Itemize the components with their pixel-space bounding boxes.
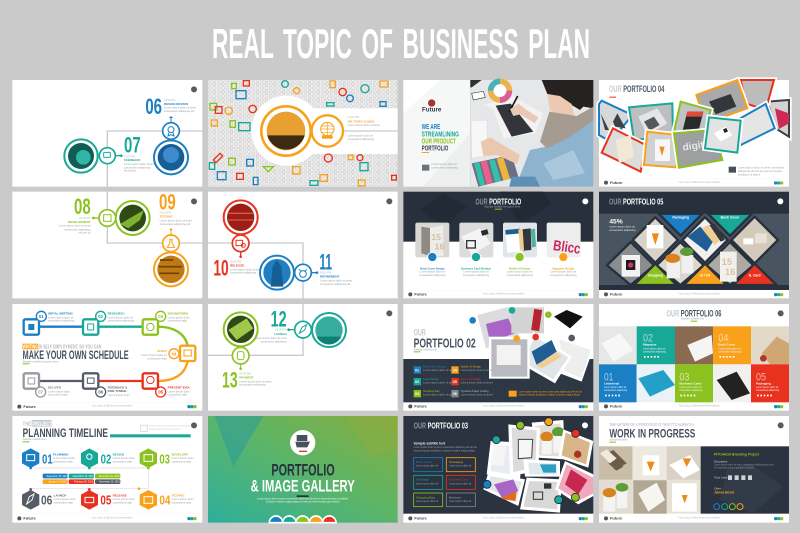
slide group: bottom-left quadrant: [12, 304, 398, 523]
diamonds: [607, 214, 778, 285]
slide: portfolio 03: eiusmod tempor incididunt ut labore et dolore magna aliqua: [414, 449, 476, 452]
slide: portfolio 06: consectetur adipiscing: [604, 389, 628, 392]
slide: portfolio 02: Shopping Bag: [423, 389, 440, 393]
slide: 08 and 09 timeline: 08: [74, 194, 91, 219]
slide: portfolio 02: Book Cover Design: [423, 365, 446, 369]
slide: our portfolio cards: Sample subtitle text goes here: [484, 204, 521, 208]
slide: portfolio 02: Lorem ipsum dolor sit amet: [461, 380, 493, 384]
slide: planning timeline: consectetur adip: [53, 459, 73, 463]
footer: [408, 403, 588, 409]
slide: 10 and 11 timeline: REFINEMENT: [320, 275, 340, 279]
slide: 08 and 09 timeline: 09: [159, 189, 176, 214]
footer: [403, 290, 593, 297]
footer: Your topic of Business presentation: [678, 515, 720, 519]
slide: portfolio 02: Lorem ipsum dolor sit amet: [461, 368, 493, 372]
slide: 10 and 11 timeline: Lorem ipsum dolor sit amet: [320, 279, 352, 283]
outlined boxes: [414, 458, 475, 507]
slide: we turn global: [208, 80, 398, 187]
slide: 06 and 07 timeline: consectetur adipiscing: [124, 165, 151, 169]
slide: 06 and 07 timeline: Lorem ipsum dolor sit amet: [124, 162, 156, 166]
numbered list: 06: [453, 392, 457, 396]
slide: portfolio 03: Shopping Bag: [416, 495, 435, 499]
slide: portfolio 02: Lorem ipsum dolor sit amet: [423, 392, 455, 396]
slide: 06 and 07 timeline: consectetur adipiscing elit: [164, 109, 195, 113]
slide: planning timeline: 05: [100, 493, 111, 507]
headline: [422, 122, 459, 153]
slide: our portfolio cards: Mobile UI Design: [509, 266, 531, 270]
slide: make your own schedule: Lorem ipsum dolor sit: [141, 353, 167, 357]
slide: make your own schedule: BRAINSTORM: [168, 311, 188, 315]
footer: Future: [414, 404, 428, 409]
slide: portfolio 03: Lorem ipsum dolor sit: [449, 482, 472, 485]
footer: Your topic of Business presentation: [483, 515, 525, 519]
slide: our portfolio cards: Lorem ipsum dolor sit: [463, 270, 489, 274]
footer: Future: [610, 404, 623, 409]
slide: our portfolio cards: [403, 192, 593, 298]
slide: planning timeline: Lorem ipsum dolor: [113, 497, 135, 501]
slide: portfolio 05: OUR PORTFOLIO 05: [609, 196, 663, 206]
slide: planning timeline: TESTING: [172, 493, 185, 497]
slide: 10 and 11 timeline: 03:00 PM: [230, 259, 241, 263]
slide: portfolio 03: Lorem ipsum dolor sit: [449, 465, 472, 468]
slide: portfolio and image gallery cover: [208, 416, 398, 523]
date pills: [43, 474, 120, 484]
slide: work in progress: [599, 416, 789, 523]
slide: planning timeline: DESIGN: [113, 452, 124, 456]
slide: portfolio 05: Book Cover: [721, 216, 740, 220]
slide: make your own schedule: 02: [98, 314, 104, 319]
numbered list: 04: [453, 368, 458, 372]
slide: 06 and 07 timeline: Lorem ipsum dolor sit amet: [164, 106, 196, 110]
slide: planning timeline: 02: [101, 452, 111, 466]
slide: portfolio 06: consectetur adipiscing: [756, 389, 780, 392]
slide: portfolio 02: Lorem ipsum dolor sit amet consectetur adipiscing elit sed do: [519, 390, 582, 393]
cards: Blicc: [552, 238, 581, 258]
headline: WE ARE: [422, 122, 440, 131]
slide: portfolio and image gallery cover: PORTFOLIO: [271, 460, 335, 479]
slide: portfolio 06: Packaging: [756, 381, 771, 385]
slide: 12 and 13 timeline: Lorem ipsum dolor sit amet: [255, 336, 287, 340]
slide: our portfolio cards: Lorem ipsum dolor sit: [420, 270, 445, 274]
slide: portfolio 05: 45%: [609, 218, 623, 225]
slide: work in progress: WORK IN PROGRESS: [609, 426, 695, 440]
footer: Future: [23, 404, 37, 409]
footer: Future: [610, 292, 623, 297]
slide: portfolio 02: PORTFOLIO 02: [414, 336, 476, 350]
slide: planning timeline: Lorem ipsum dolor: [172, 497, 194, 501]
slide: portfolio 02: Mobile UI Design: [461, 365, 481, 369]
footer: Your topic of Business presentation: [91, 403, 133, 407]
slide: planning timeline: Lorem ipsum dolor sit amet consectetur: [149, 425, 190, 428]
footer: Future: [414, 292, 428, 297]
slide: make your own schedule: 05: [158, 390, 164, 395]
slide: portfolio 06: OUR PORTFOLIO 06: [667, 308, 721, 318]
numbered list: [414, 366, 459, 397]
slide: portfolio 03: OUR PORTFOLIO 03: [414, 420, 468, 430]
slide: planning timeline: 03: [159, 452, 170, 466]
slide: portfolio 03: Book Cover: [416, 460, 432, 464]
slide: work in progress: Lorem ipsum dolor sit amet consectetur adipiscing elit sed: [714, 463, 774, 466]
slide: make your own schedule: Lorem ipsum dolor: [168, 315, 190, 319]
headline: WRITING IS SELF EMPLOYMENT, SO YOU CAN: [23, 345, 101, 351]
slide: make your own schedule: Lorem ipsum dolor sit: [48, 315, 74, 319]
slide group: bottom-right quadrant: [403, 304, 789, 523]
slide: planning timeline: Lorem ipsum dolor: [113, 456, 135, 460]
slide: 08 and 09 timeline: DEVELOPMENT: [68, 220, 91, 224]
slide: portfolio 06: Lorem ipsum dolor sit: [604, 386, 627, 389]
slide: portfolio 06: Lorem ipsum dolor sit: [679, 386, 702, 389]
slide: planning timeline: Sample subtitle text: [23, 437, 46, 441]
slide: portfolio 03: Lorem ipsum dolor sit: [416, 482, 439, 485]
footer: [12, 403, 202, 409]
slide: 08 and 09 timeline: elit sed do: [79, 231, 91, 235]
slide: make your own schedule: BUILD: [158, 349, 168, 353]
slide: make your own schedule: FEEDBACK &: [108, 385, 128, 389]
slide: portfolio 03: Lorem ipsum dolor sit: [416, 500, 439, 503]
slide: portfolio 06: 01: [604, 371, 613, 383]
slide: make your own schedule: 01: [39, 314, 44, 319]
slide: portfolio 06: 04: [718, 332, 728, 344]
slide: portfolio 02: Typeface Paper Cutting: [461, 389, 489, 393]
slide: portfolio 06: consectetur adipiscing: [679, 389, 703, 392]
slide: our portfolio cards: Book Cover Design: [420, 266, 445, 270]
slide: planning timeline: RELEASE: [113, 493, 127, 497]
footer: Future: [610, 180, 623, 185]
slide: portfolio 02: Lorem ipsum dolor sit amet: [423, 368, 455, 372]
slide: portfolio 03: Lorem ipsum dolor sit: [449, 500, 472, 503]
slide: portfolio 04: incididunt ut labore: [738, 172, 761, 176]
slide: portfolio 02: Logo Mockup: [423, 377, 439, 381]
slide group: top-right quadrant: [403, 80, 789, 298]
slide: portfolio 02: Sample subtitle text: [414, 347, 437, 351]
slide: 12 and 13 timeline: LAUNCH: [274, 332, 287, 336]
slide: 08 and 09 timeline: 03:00 PM: [79, 216, 91, 220]
footer: [599, 179, 789, 185]
slide: our portfolio cards: Business Card Mockup: [461, 266, 491, 270]
photo collage: [483, 420, 593, 513]
slide: planning timeline: LAUNCH: [54, 493, 66, 497]
slide: make your own schedule: consectetur adipiscing: [48, 319, 75, 323]
slide: portfolio 06: Lorem ipsum dolor sit: [643, 347, 666, 350]
slide: planning timeline: consectetur adip: [172, 459, 192, 463]
slide: portfolio 06: consectetur adipiscing: [718, 350, 742, 353]
slide: planning timeline: DEVELOPE: [172, 452, 188, 456]
footer: [604, 515, 783, 521]
slide: make your own schedule: [12, 304, 202, 411]
slide: make your own schedule: PRESENT IDEA: [168, 385, 191, 389]
numbered list: 03: [415, 392, 419, 396]
hexagons bottom row: [22, 490, 157, 510]
slide: portfolio 06: Magazine: [643, 343, 657, 347]
slide: portfolio 06: [599, 304, 789, 411]
headline: PORTFOLIO: [422, 144, 448, 153]
slide: we turn global: 03:00 PM: [348, 115, 359, 119]
numbered list: 02: [415, 380, 419, 384]
slide: portfolio 05: Lorem ipsum dolor sit: [609, 225, 635, 229]
numbered list: 01: [415, 368, 419, 372]
slide: portfolio 03: Lorem ipsum dolor sit amet consectetur adipiscing elit sed do: [414, 446, 477, 449]
slide: our portfolio cards: Magazine Design: [553, 266, 574, 270]
slide: portfolio 04: [599, 80, 789, 187]
slide: we turn global: WE TURN GLOBAL: [348, 119, 375, 123]
slide: work in progress: Tools Used:: [714, 476, 728, 480]
slide: portfolio 03: Sample subtitle text: [414, 441, 446, 445]
mockup grid: [599, 446, 701, 514]
slide: streamlining product portfolio: [403, 80, 593, 187]
slide: portfolio 05: UI / UX: [700, 274, 711, 278]
slide: we turn global: Lorem ipsum dolor sit amet: [348, 123, 380, 127]
slide: make your own schedule: 03: [158, 314, 164, 319]
slide: planning timeline: PLANNING TIMELINE: [23, 426, 108, 440]
slide: make your own schedule: Lorem ipsum dolor: [108, 393, 130, 397]
slide: work in progress: Description:: [714, 459, 728, 463]
slide: portfolio 02: Lorem ipsum dolor sit amet: [461, 392, 493, 396]
slide: work in progress: James Bond: [714, 490, 734, 494]
slide: make your own schedule: consectetur adip: [168, 319, 188, 323]
date pills: January 14, 2016: [48, 481, 67, 484]
slide: portfolio 02: eiusmod tempor incididunt ut labore et dolore magna aliqua: [519, 394, 581, 397]
slide: make your own schedule: FINE TUNING: [108, 389, 127, 393]
slide: make your own schedule: 04: [172, 351, 177, 356]
logo: Future: [422, 106, 442, 113]
footer: Future: [610, 516, 623, 521]
footer: Your topic of Business presentation: [483, 403, 525, 407]
slide: planning timeline: consectetur adip: [54, 500, 74, 504]
slide: planning timeline: consectetur adip: [172, 500, 192, 504]
footer: Your topic of Business presentation: [678, 180, 720, 184]
slide: portfolio 03: [403, 416, 593, 523]
slide: 12 and 13 timeline: 03:00 PM: [275, 328, 287, 332]
slide: portfolio 06: Book Cover: [718, 343, 736, 347]
slide: make your own schedule: Lorem ipsum dolor: [168, 389, 190, 393]
footer: Future: [23, 516, 37, 521]
slide: make your own schedule: Lorem ipsum dolor sit: [108, 315, 133, 319]
slide: our portfolio cards: consectetur adipiscing: [463, 273, 490, 277]
slide: portfolio and image gallery cover: Lorem ipsum dolor sit amet consectetur adipiscing elit sed do eiusmod tempor incididunt: [257, 497, 348, 500]
slide: portfolio 03: Brochure: [449, 495, 461, 499]
slide: portfolio and image gallery cover: & IMAGE GALLERY: [251, 476, 355, 495]
footer: [12, 514, 202, 521]
footer: Your topic of Business presentation: [678, 292, 720, 296]
headline: STREAMLINING: [422, 129, 459, 138]
slide: 06 and 07 timeline: 07: [124, 133, 141, 158]
slide: portfolio 04: adipiscing elit sed do eiusmod tempor: [738, 169, 783, 173]
slide: portfolio 05: 16: [725, 267, 735, 277]
date pills: November 25, 2015: [99, 475, 120, 478]
slide: our portfolio cards: Lorem ipsum dolor sit: [551, 270, 576, 274]
slide: 08 and 09 timeline: TESTING: [160, 215, 173, 219]
slide: portfolio 03: Lorem ipsum dolor sit: [416, 465, 439, 468]
headline: MAKE YOUR OWN SCHEDULE: [23, 348, 129, 362]
slide: 08 and 09 timeline: consectetur adipiscing elit: [160, 222, 190, 226]
slide: portfolio 06: Letterhead: [604, 381, 619, 385]
slide: 08 and 09 timeline: Lorem ipsum dolor sit amet: [160, 219, 192, 223]
slide: planning timeline: [12, 416, 202, 523]
footer: Your topic of Business presentation: [678, 403, 720, 407]
photo collage: digital: [682, 139, 713, 154]
slide group: top-left quadrant: [12, 80, 398, 298]
slide: make your own schedule: consectetur adipiscing: [108, 319, 134, 323]
colour dots: [269, 516, 336, 523]
slide: portfolio 02: OUR: [414, 328, 426, 338]
photo collage: [474, 304, 593, 383]
slide: portfolio 03: UI Design: [416, 478, 429, 482]
footer: [604, 292, 783, 297]
slide: planning timeline: adipiscing elit sed do eiusmod: [149, 428, 181, 431]
slide: 06 and 07 timeline: [12, 80, 202, 187]
slide: 08 and 09 timeline: [12, 189, 202, 298]
slide: 10 and 11 timeline: 10: [213, 255, 229, 280]
slide: make your own schedule: DELIVER: [48, 385, 62, 389]
slide: 12 and 13 timeline: consectetur adipiscing: [239, 383, 266, 387]
photo collage: [599, 80, 789, 172]
slide: streamlining product portfolio: Lorem ipsum dolor sit: [431, 162, 457, 166]
slide: portfolio 02: Lorem ipsum dolor sit amet: [423, 380, 455, 384]
cards: 16: [435, 241, 444, 251]
slide: portfolio 06: Business Cards: [679, 381, 702, 385]
slide: make your own schedule: 06: [98, 390, 104, 395]
slide: we turn global: Lorem ipsum dolor sit: [348, 133, 373, 137]
slide: 12 and 13 timeline: consectetur adipiscing: [260, 339, 287, 343]
slide: 10 and 11 timeline: 03:00 PM: [320, 270, 331, 274]
slide: planning timeline: THE PROJECT: [23, 421, 52, 428]
slide: portfolio 06: Lorem ipsum dolor sit: [756, 386, 779, 389]
slide: make your own schedule: Lorem ipsum dolor: [48, 389, 70, 393]
slide: 12 and 13 timeline: 12: [271, 307, 287, 332]
slide: our portfolio cards: consectetur adipiscing: [419, 273, 446, 277]
slide: 12 and 13 timeline: 03:00 PM: [239, 371, 251, 375]
numbered list: 05: [453, 380, 457, 384]
footer: Your topic of Business presentation: [91, 515, 133, 519]
slide: make your own schedule: consectetur adip: [168, 393, 188, 397]
slide: 06 and 07 timeline: DESIGN REVIEW: [164, 102, 188, 106]
slide: 10 and 11 timeline: Lorem ipsum dolor sit amet: [230, 267, 262, 271]
slide: portfolio 04: OUR PORTFOLIO 04: [609, 84, 664, 94]
slide: work in progress: THE NATURE OF A PORTFOLIO IS THAT IT'S ALWAYS A: [609, 422, 694, 428]
slide: planning timeline: 06: [41, 493, 52, 507]
slide: portfolio and image gallery cover: ut labore et dolore magna aliqua ut enim ad minim veniam quis nostrud: [266, 500, 340, 503]
slide: 06 and 07 timeline: 03:00 PM: [164, 98, 175, 102]
date pills: September 25, 2015: [73, 475, 94, 478]
footer: Future: [414, 516, 428, 521]
slide: portfolio 06: Sample subtitle text: [681, 317, 704, 321]
cards: [415, 223, 581, 258]
slide: 06 and 07 timeline: 06: [145, 94, 162, 119]
slide: make your own schedule: Sample subtitle text goes here: [23, 359, 59, 363]
date pills: November 25, 2016: [99, 481, 120, 484]
slide: work in progress: do eiusmod tempor incididunt ut labore: [714, 466, 755, 469]
slide: work in progress: Sample subtitle: [609, 438, 628, 442]
slide: portfolio 06: 05: [756, 371, 766, 383]
slide: portfolio 06: 02: [643, 332, 653, 344]
slide: planning timeline: Lorem ipsum dolor: [172, 456, 194, 460]
slide: portfolio 03: Business Card: [449, 478, 469, 482]
slide: our portfolio cards: OUR PORTFOLIO: [475, 196, 521, 206]
slide: 08 and 09 timeline: consectetur adipiscing: [64, 227, 91, 231]
date pills: February 28, 2016: [74, 481, 94, 484]
slide: planning timeline: PLANNING: [53, 452, 69, 456]
slide: 08 and 09 timeline: Lorem ipsum dolor sit amet: [59, 224, 91, 228]
slide: work in progress: PITCHAGA Branding Project: [714, 453, 760, 457]
slide: planning timeline: consectetur adip: [113, 459, 133, 463]
slide: our portfolio cards: Lorem ipsum dolor sit: [507, 270, 533, 274]
slide: make your own schedule: INITIAL MEETING: [48, 311, 73, 315]
slide: 10 and 11 timeline: RELEASE: [230, 264, 244, 268]
slide: portfolio 06: 03: [679, 371, 689, 383]
slide: 12 and 13 timeline: PAYMENT: [239, 376, 254, 380]
footer: [408, 515, 588, 521]
slide: portfolio 02: Flyer / A4 Design: [461, 377, 481, 381]
slide: planning timeline: consectetur adip: [113, 500, 133, 504]
logo: [422, 99, 442, 113]
cards: 15: [431, 232, 441, 242]
slide: our portfolio cards: consectetur adipiscing: [550, 273, 577, 277]
photo: designer at desk: [470, 80, 593, 187]
slide: portfolio 03: Packaging: [449, 460, 463, 464]
slide: 06 and 07 timeline: FEEDBACK: [124, 158, 141, 162]
slide: make your own schedule: consectetur adip: [147, 356, 167, 360]
slide: make your own schedule: 07: [38, 390, 44, 395]
slide: portfolio 04: Lorem ipsum dolor sit amet consectetur: [738, 166, 785, 170]
slide: 08 and 09 timeline: 03:00 PM: [160, 211, 171, 215]
slide: portfolio 05: 15: [722, 257, 732, 267]
slide: make your own schedule: RESEARCH: [108, 311, 124, 315]
slide: we turn global: consectetur adipiscing: [348, 137, 374, 141]
slide: planning timeline: 04: [159, 493, 170, 507]
date pills: September 25, 2015: [47, 475, 68, 478]
footer: [604, 403, 783, 409]
headline: OUR PRODUCT: [422, 136, 456, 145]
slide: portfolio 05: Shopping: [648, 274, 663, 278]
slide: 10 and 11 timeline: consectetur adipiscing elit: [320, 282, 351, 286]
slide: planning timeline: Lorem ipsum dolor: [53, 456, 75, 460]
slide: 12 and 13 timeline: 13: [222, 367, 238, 392]
slide: portfolio 06: Lorem ipsum dolor sit: [718, 347, 741, 350]
slide: portfolio 05: Packaging: [672, 216, 689, 220]
slide: 10 and 11 timeline: consectetur adipiscing: [230, 271, 257, 275]
slide: work in progress: Client:: [714, 486, 722, 490]
slide: planning timeline: Lorem ipsum dolor: [54, 497, 76, 501]
slide: 12 and 13 timeline: [208, 304, 398, 411]
slide: 10 and 11 timeline: 11: [319, 249, 332, 274]
headline: [22, 344, 129, 362]
slide: portfolio 02: [403, 304, 593, 411]
slide: 10 and 11 timeline: [208, 192, 398, 298]
footer: Your topic of Business presentation: [483, 292, 525, 296]
slide: portfolio 05: B. Card: [749, 274, 761, 278]
slide: portfolio 05: consectetur adipiscing: [609, 228, 636, 232]
slide: make your own schedule: consectetur adip: [48, 393, 68, 397]
slide: portfolio 05: [599, 192, 789, 298]
slide: 12 and 13 timeline: Lorem ipsum dolor sit amet: [239, 379, 272, 383]
slide: planning timeline: 01: [42, 452, 53, 466]
cover icon: [290, 430, 315, 455]
slide: streamlining product portfolio: consectetur adipiscing: [431, 165, 458, 169]
slide: 06 and 07 timeline: 03:00 PM: [124, 154, 135, 158]
hexagons top row: [22, 448, 157, 468]
slide: 06 and 07 timeline: elit sed do: [124, 169, 137, 173]
slide: portfolio 06: consectetur adipiscing: [643, 350, 667, 353]
slide: our portfolio cards: consectetur adipiscing: [507, 273, 533, 277]
